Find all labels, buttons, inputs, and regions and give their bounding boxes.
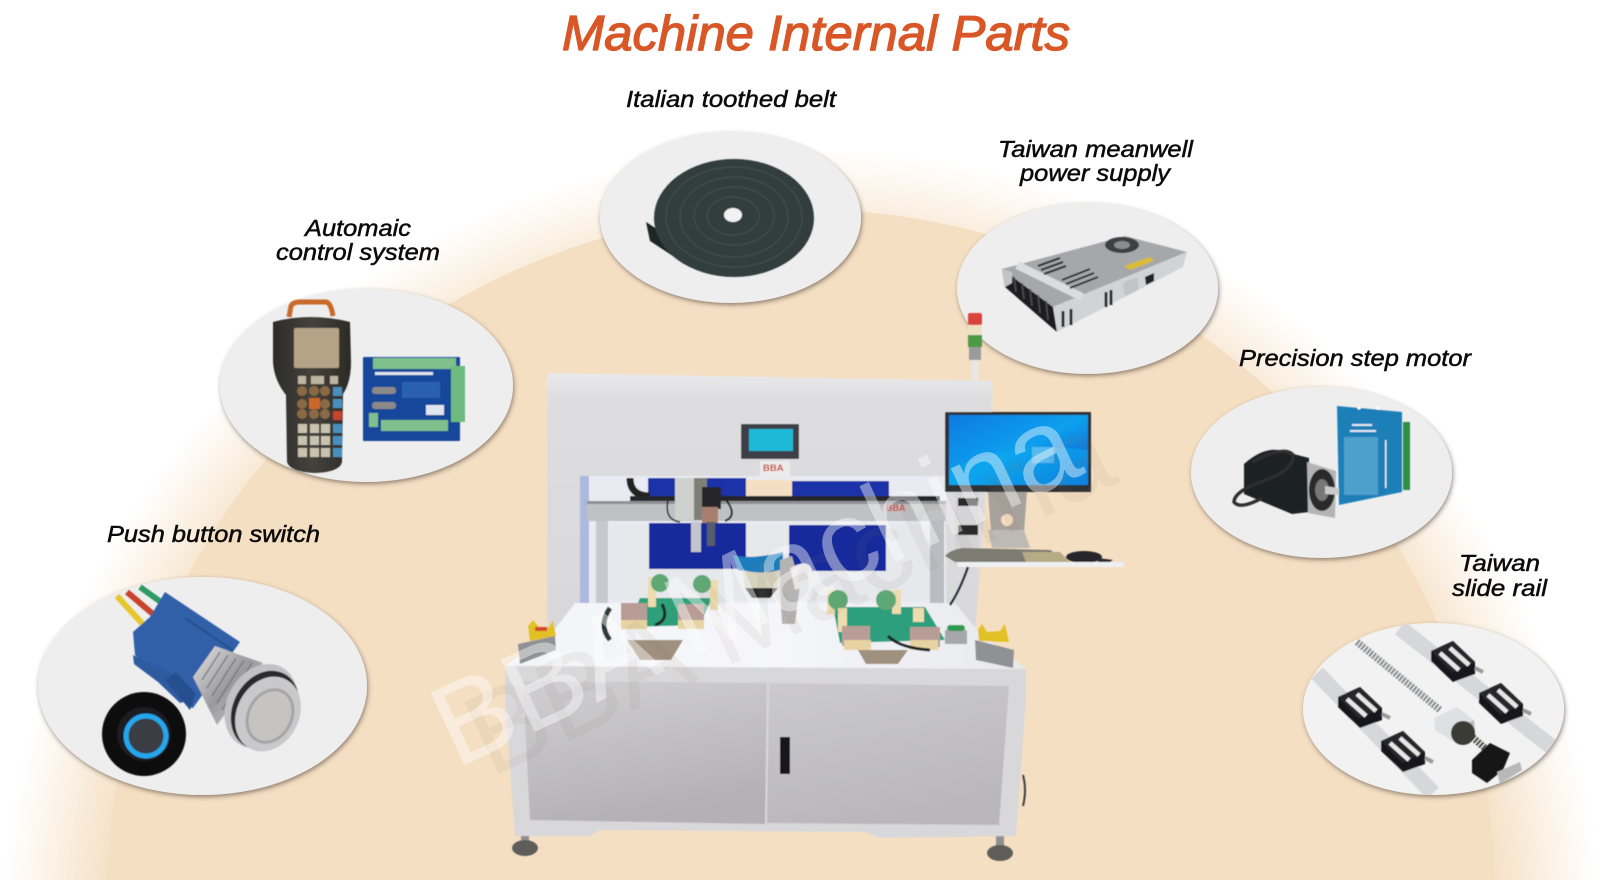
- oval: power supply: [957, 203, 1218, 374]
- label: automatic control system: control system: [276, 239, 440, 265]
- label: power supply: Taiwan meanwell: [998, 136, 1194, 162]
- left fixture: [604, 574, 718, 660]
- vibration bowl feeder: [733, 552, 783, 598]
- title: Machine Internal Parts: [562, 7, 1070, 61]
- panel: automatic control system: [220, 215, 513, 482]
- cabinet feet: [512, 775, 1025, 861]
- panel: taiwan meanwell power supply: [957, 136, 1218, 374]
- panel: push button switch: [38, 521, 367, 795]
- machine: [505, 313, 1125, 861]
- work window: [580, 476, 946, 604]
- oval: step motor: [1191, 387, 1452, 558]
- robot feeder: [780, 556, 812, 624]
- watermark: BBA Machina: [411, 377, 1098, 792]
- label: slide rail: Taiwan: [1459, 550, 1540, 576]
- dispensing head: [667, 478, 732, 552]
- keyboard shelf: [945, 548, 1125, 605]
- icon: push button switch: [102, 587, 314, 776]
- oval: belt: [600, 132, 861, 303]
- panel: italian toothed belt: [600, 86, 861, 303]
- label: power supply: power supply: [1019, 160, 1171, 186]
- hmi touch panel: BBA: [763, 463, 784, 474]
- door handle: [780, 737, 790, 774]
- icon: power supply unit: [1002, 236, 1187, 332]
- hmi touch panel: [741, 424, 799, 479]
- monitor arm: [955, 492, 1030, 564]
- left start button box: [518, 620, 556, 664]
- left door: [523, 681, 767, 824]
- label: slide rail: [1452, 550, 1548, 601]
- label: automatic control system: Automaic: [303, 215, 411, 241]
- icon: belt coil: [646, 159, 814, 277]
- icon: handheld controller: [273, 302, 351, 473]
- panel: precision step motor: [1191, 345, 1472, 558]
- oval: push button switch: [38, 577, 367, 795]
- label: power supply: [998, 136, 1194, 186]
- table top: [505, 603, 1026, 669]
- monitor: [945, 412, 1091, 492]
- green button block: [945, 625, 967, 644]
- label: italian toothed belt: Italian toothed belt: [626, 86, 838, 112]
- label: precision step motor: Precision step motor: [1239, 345, 1472, 371]
- icon: linear rails and ball screw: [1317, 628, 1553, 793]
- oval: control system: [220, 289, 513, 482]
- icon: motion control board: [363, 357, 465, 441]
- oval: slide rail: [1303, 623, 1564, 795]
- top gantry panel: [547, 373, 992, 632]
- panel: taiwan slide rail: [1303, 550, 1564, 795]
- work window: BBA: [886, 503, 906, 513]
- watermark: BBA Machina: [445, 386, 1132, 801]
- label: automatic control system: [276, 215, 440, 265]
- label: push button switch: Push button switch: [107, 521, 320, 547]
- right start button box: [975, 624, 1014, 668]
- label: slide rail: slide rail: [1452, 575, 1548, 601]
- stack light: [968, 313, 982, 380]
- right fixture: [827, 590, 945, 664]
- icon: step motor: [1234, 450, 1339, 518]
- cabinet body: [505, 666, 1026, 838]
- right door: [767, 683, 1009, 825]
- icon: servo driver: [1337, 406, 1410, 505]
